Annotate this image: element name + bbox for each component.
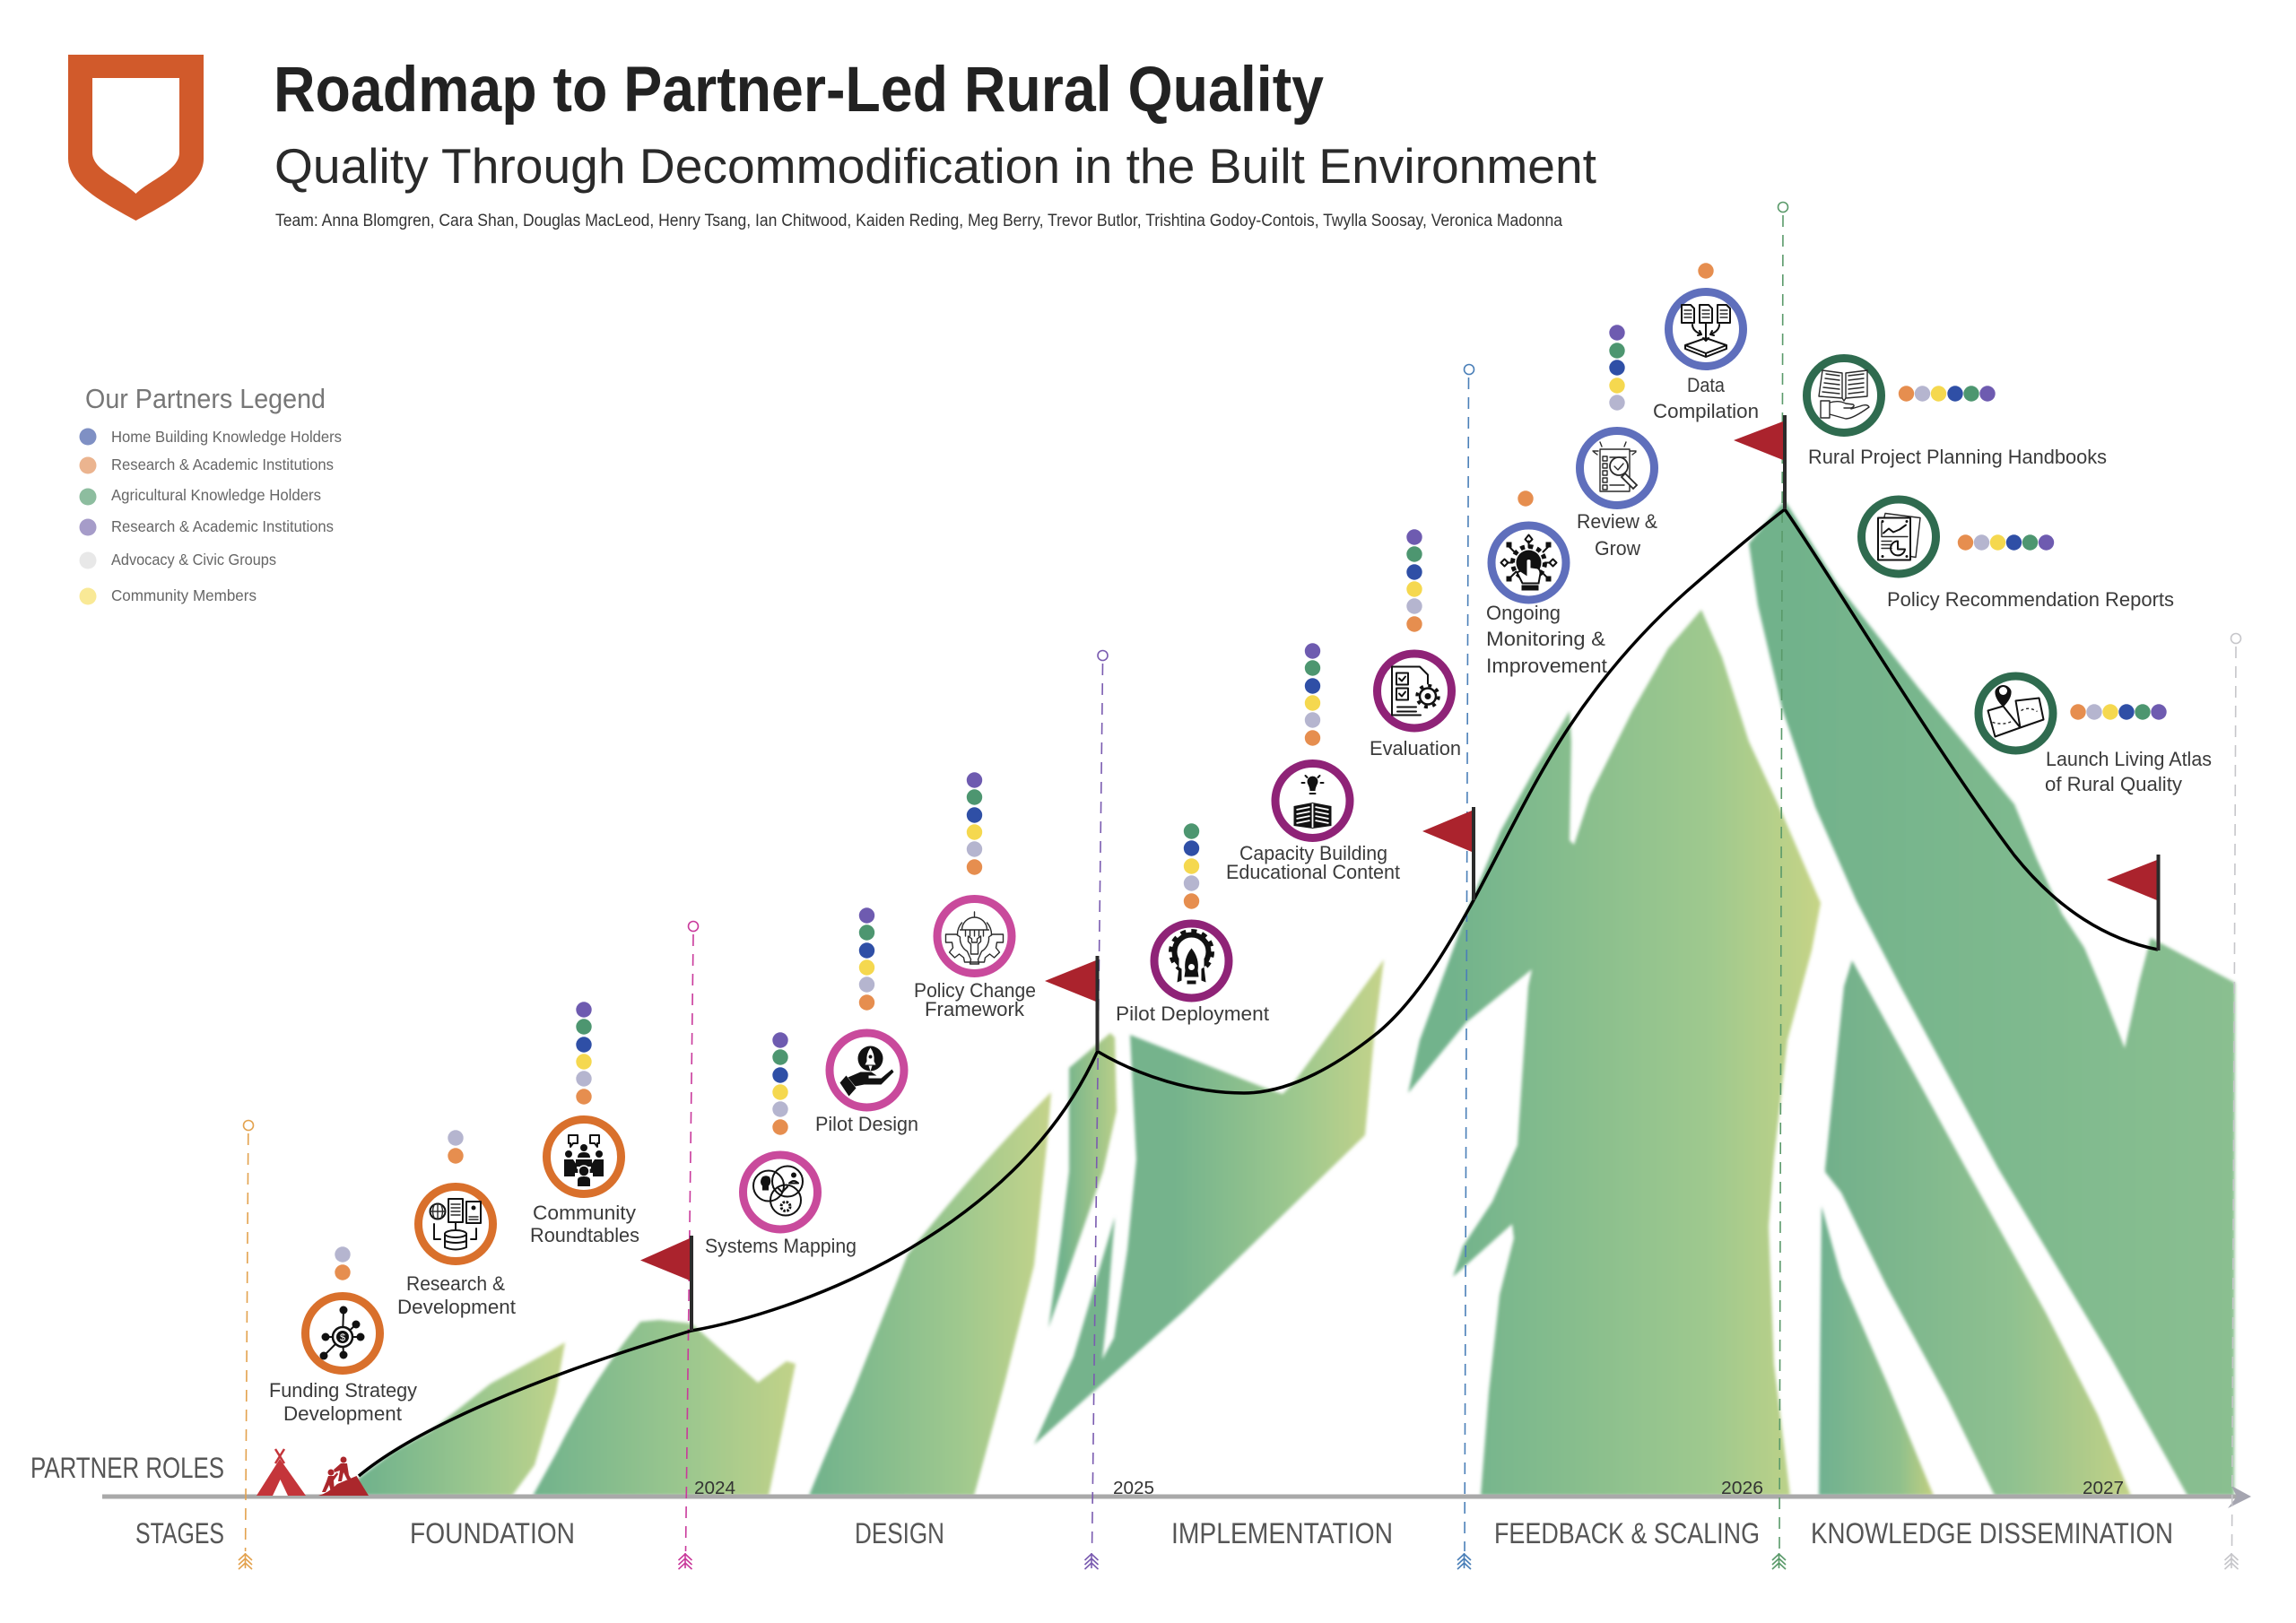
title: Roadmap to Partner-Led Rural Quality [274,55,1324,126]
partner dots [448,1130,464,1164]
partner dots [1518,490,1534,507]
legend row: home building: Home Building Knowledge Holders [111,428,342,446]
partner dots [1899,386,1996,402]
subtitle: Quality Through Decommodification in the Built Environment [274,138,1596,194]
ring [830,1033,904,1107]
label: Roundtables [530,1224,639,1246]
label: Monitoring & [1486,628,1605,650]
deliverable: rural project planning handbooks [1806,359,2107,468]
stage labels row: STAGES [135,1517,224,1549]
label: Framework [925,998,1025,1020]
deliverable: launch living atlas [1979,676,2212,795]
label: Rural Project Planning Handbooks [1808,446,2107,468]
partner dots [576,1002,592,1105]
partner dots [1184,823,1199,909]
label: Data [1687,374,1726,396]
label: Research & [406,1272,505,1295]
year labels [694,1479,2124,1498]
stage divider: feedback end (green) [1772,203,1788,1569]
stage divider: implementation end (blue) [1457,364,1474,1569]
flag 2 [1045,956,1098,1051]
label: Pilot Design [815,1113,918,1135]
partner dots [1609,325,1625,411]
milestone: policy change framework [914,772,1036,1020]
icon: climbers on mound [318,1456,369,1496]
icon: gear and rocket [1171,931,1213,990]
label: Systems Mapping [705,1235,857,1257]
label: Evaluation [1370,737,1461,759]
team credits: Team: Anna Blomgren, Cara Shan, Douglas MacLeod, Henry Tsang, Ian Chitwood, Kaiden Reding, Meg Berry, Trevor Butlor, Trishtina Godoy-Contois, Twylla Soosay, Veronica Madonna [275,212,1562,230]
year labels: 2025 [1113,1479,1154,1498]
label: Compilation [1653,400,1759,422]
ring [1378,654,1451,728]
label: Development [397,1296,516,1318]
label [530,1202,639,1246]
legend row: research academic orange: Research & Academic Institutions [111,456,334,473]
partner dots [859,907,874,1011]
partner dots [967,772,982,875]
label [1653,374,1759,422]
label: of Rural Quality [2045,773,2182,795]
stage divider: end (grey) [2224,633,2240,1569]
icon: people at table [564,1135,604,1186]
icon: research data [430,1199,481,1250]
label: Grow [1595,537,1640,560]
icon: map with pin [1987,685,2043,737]
icon: hand holding rocket [839,1046,893,1096]
milestone: pilot deployment [1116,823,1269,1025]
ring [1275,764,1350,838]
icon: venn diagram [753,1166,803,1216]
label: Launch Living Atlas [2046,748,2212,770]
ring [305,1297,380,1370]
label: Policy Recommendation Reports [1887,588,2174,611]
icon: funding network [319,1306,364,1359]
partner dots [1958,534,2054,551]
partner dots [1406,529,1422,632]
label: Review & [1577,510,1657,533]
ring [1492,525,1566,600]
icon: book and bulb [1293,776,1331,829]
milestone: capacity building [1226,643,1400,883]
legend row: advocacy: Advocacy & Civic Groups [111,551,276,568]
flag 1 [640,1236,691,1331]
row heading: partner roles: PARTNER ROLES [30,1452,224,1484]
timeline axis with arrow [102,1486,2251,1508]
milestone: funding strategy development [269,1246,417,1425]
stage divider: design end (purple) [1085,651,1108,1569]
stage divider: foundation end (magenta) [678,922,698,1569]
partner dots [1305,643,1320,746]
year labels: 2027 [2083,1479,2124,1498]
legend heading: Our Partners Legend [85,383,326,414]
label: Policy Change [914,979,1036,1002]
deliverable: policy recommendation reports [1862,499,2174,611]
ring [937,898,1012,974]
stage labels row: DESIGN [855,1517,944,1549]
stage divider: start (orange) [239,1121,253,1569]
ring [1668,292,1744,366]
ring [743,1155,818,1229]
label: Capacity Building [1239,842,1387,864]
icon: book on hand [1819,370,1869,419]
icon: funding network: $ [340,1332,345,1343]
icon: documents into box [1682,305,1730,357]
label [1226,842,1400,883]
stage labels row: FOUNDATION [410,1517,575,1549]
label [269,1379,417,1425]
label: Development [283,1402,402,1425]
label: Funding Strategy [269,1379,417,1402]
ring [1580,430,1654,506]
label [1577,510,1657,560]
label: Community [533,1202,636,1224]
legend row: research academic purple: Research & Academic Institutions [111,517,334,535]
label [2045,748,2212,795]
icon: government gear wrench [945,912,1003,964]
milestone: ongoing monitoring and improvement [1486,490,1607,677]
legend row: agricultural: Agricultural Knowledge Holders [111,486,321,504]
milestone: evaluation [1370,529,1461,759]
ring [1979,676,2053,751]
icon: gear with hand [1501,534,1557,590]
partner dots [772,1032,788,1135]
icon: checklist and gear [1392,667,1439,716]
ring [1154,924,1229,998]
climbing path curve [359,509,2158,1476]
legend row: community: Community Members [111,586,257,604]
title block [274,55,1596,230]
partner dots [335,1246,351,1280]
stage labels row: FEEDBACK & SCALING [1494,1517,1760,1549]
label [914,979,1036,1020]
partner dots [2070,704,2167,720]
flag 3 [1422,807,1474,900]
label: Pilot Deployment [1116,1002,1269,1025]
stage labels row: KNOWLEDGE DISSEMINATION [1811,1517,2173,1549]
flag 5 [2107,855,2158,950]
label [397,1272,516,1318]
ring [1862,499,1935,574]
milestone: data compilation [1653,263,1759,422]
label: Educational Content [1226,861,1400,883]
stage labels row: IMPLEMENTATION [1171,1517,1393,1549]
ring [547,1119,621,1194]
year labels: 2026 [1721,1479,1763,1498]
label: Ongoing [1486,602,1561,624]
ring [418,1187,493,1261]
flag 4 [1734,415,1785,509]
green mountain range [352,500,2235,1496]
milestone: community roundtables [530,1002,639,1246]
milestone: research and development [397,1130,516,1318]
year labels: 2024 [694,1479,735,1498]
label [1486,602,1607,677]
legend: our partners [79,383,342,604]
milestone: pilot design [815,907,918,1135]
icon: checklist with magnifier [1593,442,1637,491]
milestone: systems mapping [705,1032,857,1257]
icon: report with charts [1878,513,1920,560]
label: Improvement [1486,655,1607,677]
partner dots [1698,263,1714,279]
icon: base camp tent [257,1449,306,1496]
stage labels row [135,1517,2173,1549]
milestone: review and grow [1577,325,1657,560]
ring [1806,359,1882,432]
logo: orange shield [68,55,204,221]
